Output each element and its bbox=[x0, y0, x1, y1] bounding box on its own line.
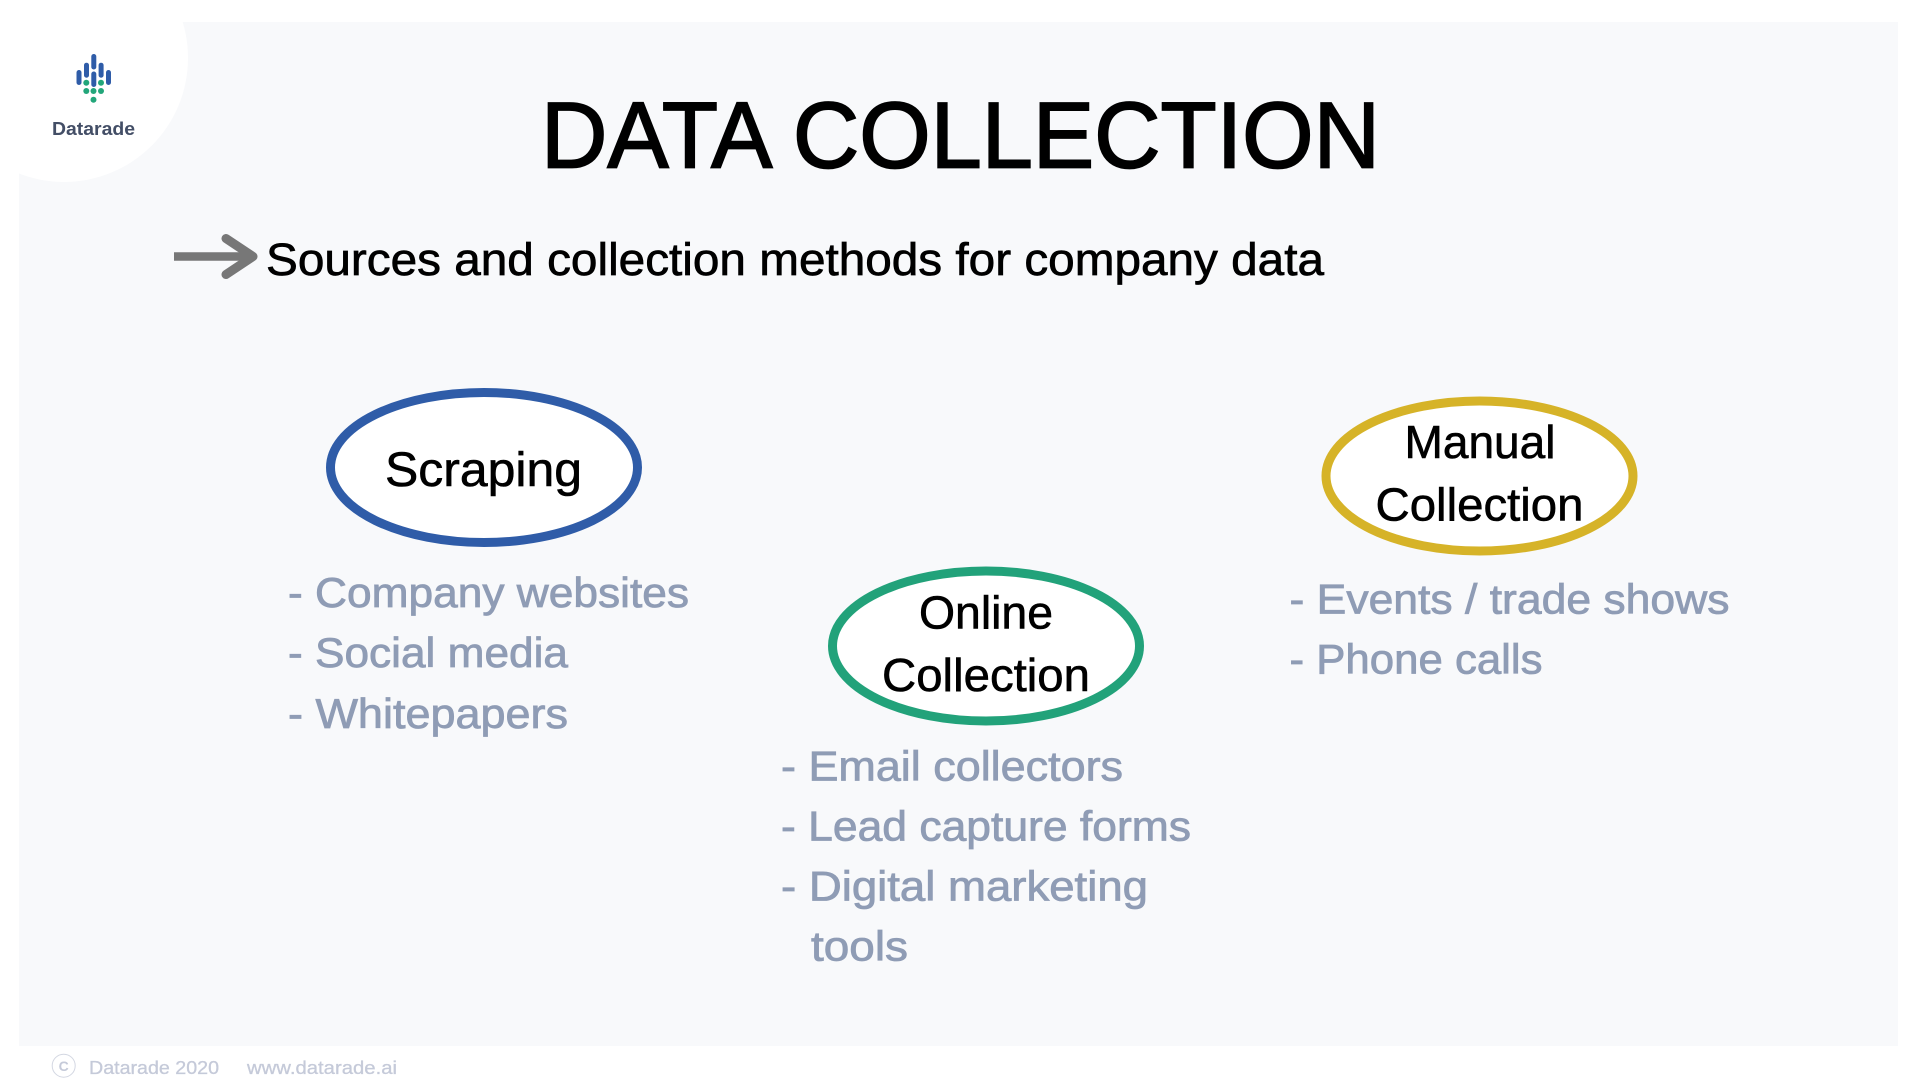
logo badge bbox=[0, 0, 188, 182]
panel: scraping bbox=[288, 392, 689, 737]
title: DATA COLLECTION bbox=[541, 82, 1380, 188]
heading: online collection: Online bbox=[919, 586, 1053, 638]
list: scraping sources: - Company websites bbox=[288, 569, 689, 616]
heading: manual collection: Manual bbox=[1404, 416, 1556, 468]
list: online methods: - Lead capture forms bbox=[781, 802, 1191, 850]
footer bbox=[52, 1054, 397, 1078]
icon: copyright bbox=[52, 1054, 75, 1077]
list: online methods: - Digital marketing bbox=[781, 862, 1148, 910]
footer text: website: www.datarade.ai bbox=[246, 1058, 397, 1078]
heading: online collection bbox=[882, 586, 1090, 701]
icon: Datarade logo bbox=[76, 54, 111, 103]
list: manual methods: - Events / trade shows bbox=[1290, 576, 1730, 622]
oval: scraping bbox=[330, 392, 638, 542]
heading: scraping: Scraping bbox=[385, 444, 582, 497]
list: online methods: - Email collectors bbox=[781, 742, 1123, 790]
list: manual methods: - Phone calls bbox=[1290, 636, 1542, 682]
panel: online collection bbox=[781, 571, 1191, 970]
list: online methods bbox=[781, 742, 1191, 970]
heading: online collection: Collection bbox=[882, 649, 1090, 701]
icon: copyright: C bbox=[59, 1058, 69, 1074]
heading: manual collection: Collection bbox=[1376, 478, 1584, 530]
oval: online collection bbox=[832, 571, 1140, 721]
heading: manual collection bbox=[1376, 416, 1584, 530]
oval: manual collection bbox=[1326, 401, 1633, 551]
arrow bbox=[174, 238, 253, 274]
logo wordmark: Datarade bbox=[52, 119, 135, 139]
list: scraping sources: - Whitepapers bbox=[288, 690, 568, 737]
panel: manual collection bbox=[1290, 401, 1730, 682]
list: manual methods bbox=[1290, 576, 1730, 682]
footer text: copyright: Datarade 2020 bbox=[89, 1058, 219, 1078]
list: scraping sources: - Social media bbox=[288, 629, 569, 676]
list: online methods: tools bbox=[811, 922, 908, 970]
subtitle: Sources and collection methods for company data bbox=[266, 234, 1325, 285]
list: scraping sources bbox=[288, 569, 689, 737]
